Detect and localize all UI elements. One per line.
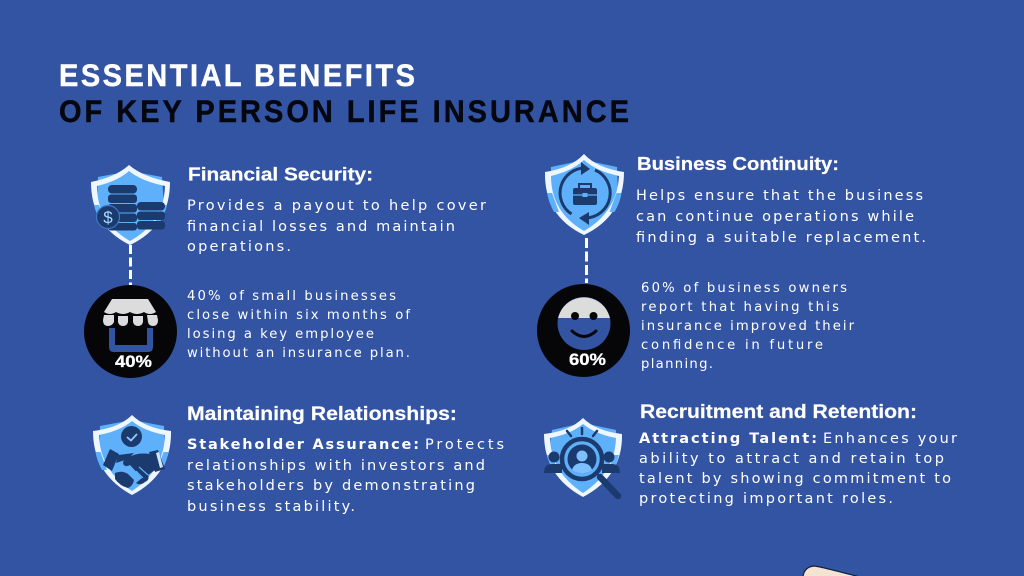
text block: Attracting Talent: (639, 431, 817, 447)
text block: Protects (425, 437, 504, 453)
text block: Helps ensure that the business (636, 188, 923, 204)
panel: business continuity (537, 153, 926, 377)
statistic text: insurance improved their (641, 319, 855, 334)
title: ESSENTIAL BENEFITS (59, 58, 415, 93)
text block: talent by showing commitment to (639, 471, 951, 487)
connector (129, 245, 132, 285)
icon: storefront 40% (84, 285, 177, 378)
statistic text: confidence in future (641, 338, 823, 353)
text block: Enhances your (823, 431, 957, 447)
statistic text: close within six months of (187, 308, 410, 323)
text block (187, 198, 486, 255)
statistic text: losing a key employee (187, 327, 374, 342)
text block: can continue operations while (636, 209, 914, 225)
icon: storefront 40%: 40% (115, 352, 152, 371)
connector (585, 238, 588, 283)
statistic text: planning. (641, 357, 713, 372)
text block: finding a suitable replacement. (636, 230, 926, 246)
icon: shield with coins (91, 165, 170, 245)
decorative clipped card corner (803, 566, 860, 576)
statistic text: 60% of business owners (641, 281, 847, 296)
title: OF KEY PERSON LIFE INSURANCE (59, 94, 629, 129)
text block: Stakeholder Assurance: (187, 437, 419, 453)
title (59, 58, 629, 129)
panel: maintaining relationships (93, 403, 504, 515)
text block: financial losses and maintain (187, 219, 455, 235)
statistic text: without an insurance plan. (187, 346, 410, 361)
icon: smiley 60% (537, 284, 630, 377)
text block: protecting important roles. (639, 491, 893, 507)
text block: Provides a payout to help cover (187, 198, 486, 214)
statistic text (641, 281, 855, 372)
heading: Recruitment and Retention: (640, 401, 917, 423)
heading: Financial Security: (188, 164, 373, 184)
statistic text: report that having this (641, 300, 839, 315)
heading: Maintaining Relationships: (187, 403, 457, 425)
text block: operations. (187, 239, 291, 255)
statistic text (187, 289, 410, 361)
text block: business stability. (187, 499, 355, 515)
icon: smiley 60%: 60% (569, 350, 606, 369)
text block: relationships with investors and (187, 458, 485, 474)
icon: shield with briefcase (545, 154, 624, 235)
text block: ability to attract and retain top (639, 451, 944, 467)
icon: shield with magnifier and people (544, 418, 622, 497)
text block (639, 431, 957, 507)
statistic text: 40% of small businesses (187, 289, 396, 304)
panel: recruitment and retention (544, 401, 957, 507)
panel: financial security (84, 164, 486, 378)
text block (636, 188, 926, 246)
heading: Business Continuity: (637, 153, 839, 174)
text block (187, 437, 504, 515)
text block: stakeholders by demonstrating (187, 478, 475, 494)
icon: shield with handshake (93, 415, 171, 495)
icon: shield with coins: $ (103, 208, 113, 227)
